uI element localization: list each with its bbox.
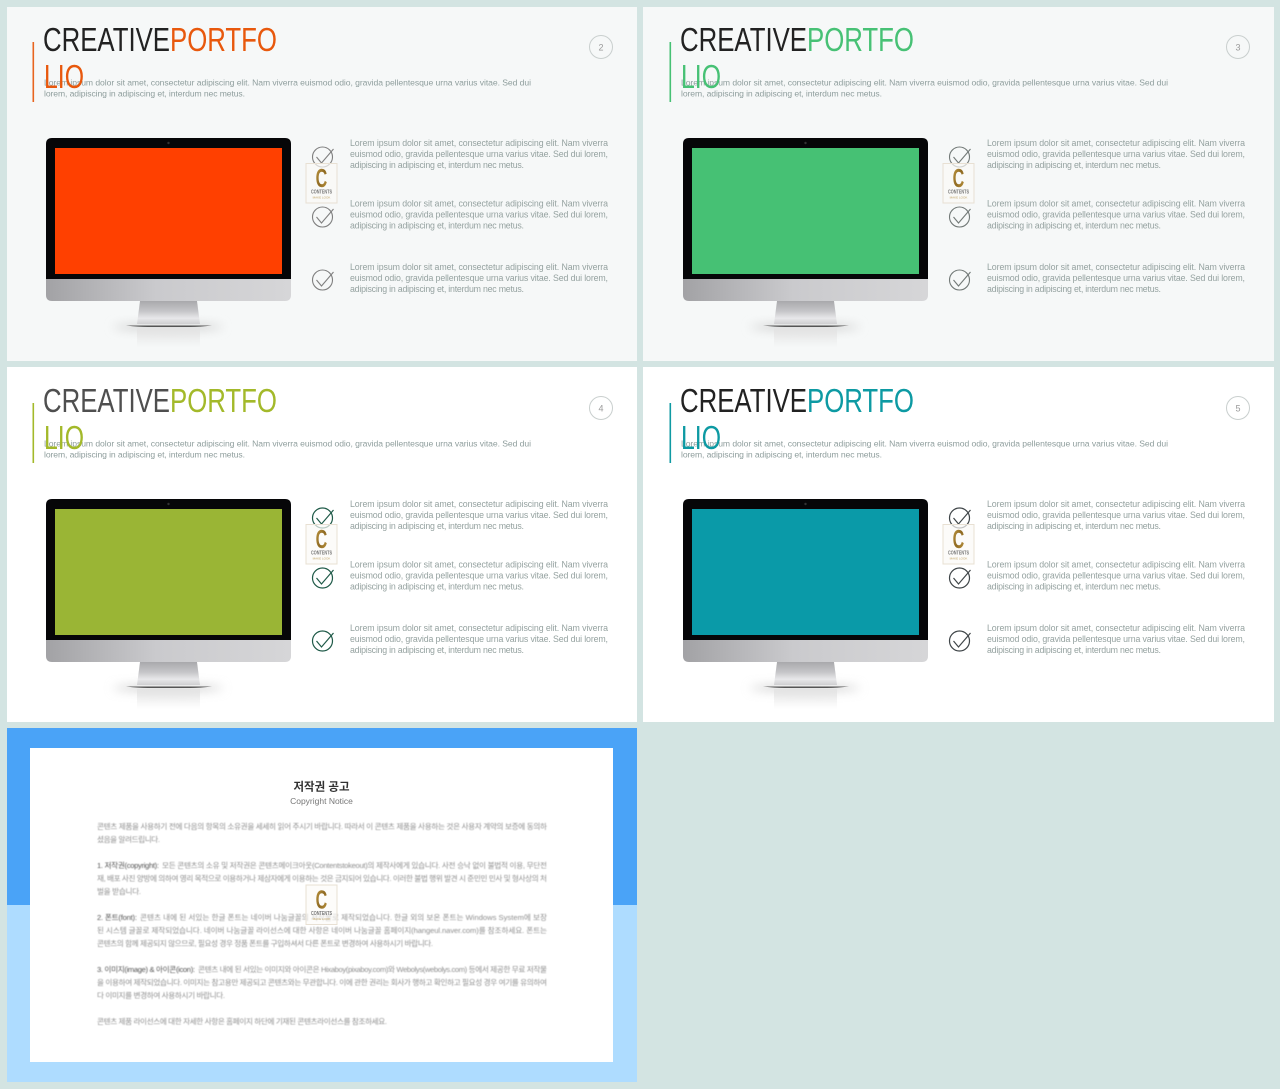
description: lorem, adipiscing in adipiscing et, interdum nec metus. [681,450,882,460]
title: PORTFO [807,382,914,419]
title [680,21,914,95]
title: CREATIVE [680,382,807,419]
title: LIO [681,58,721,95]
title [43,21,277,95]
notice body text: 셨음을 알려드립니다. [97,834,160,844]
watermark logo: C [316,163,328,193]
accent bar [670,42,671,102]
notice heading: 저작권 공고 [293,780,350,794]
watermark logo: C [953,524,965,554]
watermark logo [943,524,974,564]
notice body text: 2. 폰트(font): [97,913,137,922]
monitor [683,138,928,348]
watermark logo: C [316,524,328,554]
watermark logo: MAKE LOOK [950,196,967,200]
notice body text: 1. 저작권(copyright): [97,860,159,870]
body text: adipiscing in adipiscing et, interdum nec metus. [987,582,1161,592]
watermark logo: C [316,884,328,915]
panel: slide 4 lime [7,367,637,722]
page number: 2 [598,42,604,52]
description: lorem, adipiscing in adipiscing et, interdum nec metus. [681,88,882,98]
description [44,78,531,98]
description [681,78,1168,98]
notice body text: 을 이용하여 제작되었습니다. 이미지는 참고용만 제공되고 콘텐츠와는 무관합니다. 이에 관한 권리는 회사가 행하고 확인하고 필요성 경우 여기를 유의하여 [97,977,547,987]
title [680,382,914,456]
body text: Lorem ipsum dolor sit amet, consectetur adipiscing elit. Nam viverra [350,198,608,208]
title: CREATIVE [680,21,807,58]
body text: adipiscing in adipiscing et, interdum nec metus. [987,160,1161,170]
title: PORTFO [807,21,914,58]
notice body text: 콘텐츠 제품을 사용하기 전에 다음의 항목의 소유권을 세세히 읽어 주시기 바랍니다. 따라서 이 콘텐츠 제품을 사용하는 것은 사용자 계약의 보증에 동의하 [97,821,547,831]
watermark logo: C [953,163,965,193]
body text: euismod odio, gravida pellentesque urna varius vitae. Sed dui lorem, [987,510,1245,520]
watermark logo: CONTENTS [311,911,333,917]
notice body text: 재, 배포 사진 양방에 의하여 영리 목적으로 이용하거나 제삼자에게 이용하는 것은 금지되어 있습니다. 이러한 불법 행위 발견 시 준민민 민사 및 형사상의 처 [97,873,547,883]
body text: adipiscing in adipiscing et, interdum nec metus. [987,645,1161,655]
page number [1226,396,1250,420]
body text: euismod odio, gravida pellentesque urna varius vitae. Sed dui lorem, [987,634,1245,644]
watermark logo: MAKE LOOK [313,917,330,921]
accent bar [32,403,34,463]
body text: adipiscing in adipiscing et, interdum nec metus. [350,521,524,531]
body text: Lorem ipsum dolor sit amet, consectetur adipiscing elit. Nam viverra [987,138,1245,148]
page number: 4 [598,404,604,414]
body text: Lorem ipsum dolor sit amet, consectetur adipiscing elit. Nam viverra [987,198,1245,208]
body text: Lorem ipsum dolor sit amet, consectetur adipiscing elit. Nam viverra [350,499,608,509]
notice body text: 다 이미지를 변경하여 사용하시기 바랍니다. [97,990,225,1000]
page number: 5 [1235,404,1241,414]
body text: euismod odio, gravida pellentesque urna varius vitae. Sed dui lorem, [987,570,1245,580]
body text: euismod odio, gravida pellentesque urna varius vitae. Sed dui lorem, [350,510,608,520]
watermark logo: CONTENTS [948,190,970,196]
description [44,438,531,460]
body text: euismod odio, gravida pellentesque urna varius vitae. Sed dui lorem, [987,273,1245,283]
description: Lorem ipsum dolor sit amet, consectetur adipiscing elit. Nam viverra euismod odio, gravida pellentesque urna varius vitae. Sed dui [44,438,531,448]
body text: adipiscing in adipiscing et, interdum nec metus. [350,284,524,294]
watermark logo [306,524,337,564]
description: Lorem ipsum dolor sit amet, consectetur adipiscing elit. Nam viverra euismod odio, gravida pellentesque urna varius vitae. Sed dui [44,78,531,88]
body text: euismod odio, gravida pellentesque urna varius vitae. Sed dui lorem, [987,149,1245,159]
body text: euismod odio, gravida pellentesque urna varius vitae. Sed dui lorem, [350,634,608,644]
body text: adipiscing in adipiscing et, interdum nec metus. [987,220,1161,230]
title: CREATIVE [43,382,170,419]
description: Lorem ipsum dolor sit amet, consectetur adipiscing elit. Nam viverra euismod odio, gravida pellentesque urna varius vitae. Sed dui [681,78,1168,88]
body text: adipiscing in adipiscing et, interdum nec metus. [350,220,524,230]
body text [350,499,608,655]
title: LIO [44,58,84,95]
description: Lorem ipsum dolor sit amet, consectetur adipiscing elit. Nam viverra euismod odio, gravida pellentesque urna varius vitae. Sed dui [681,438,1168,448]
panel: slide 2 orange [7,7,637,361]
title: PORTFO [170,382,277,419]
monitor [683,499,928,709]
notice body text: 벌을 받습니다. [97,886,141,896]
body text: euismod odio, gravida pellentesque urna varius vitae. Sed dui lorem, [350,149,608,159]
title: LIO [681,419,721,456]
check icons [312,508,334,651]
body text: Lorem ipsum dolor sit amet, consectetur adipiscing elit. Nam viverra [350,560,608,570]
accent bar [670,403,671,463]
watermark logo [943,163,974,203]
notice body text: 3. 이미지(image) & 아이콘(icon): [97,964,195,974]
body text: Lorem ipsum dolor sit amet, consectetur adipiscing elit. Nam viverra [350,623,608,633]
notice body text: 콘텐츠의 함께 제공되지 않으므로, 필요성 경우 정품 폰트를 구입하셔서 다른 폰트로 변경하여 사용하시기 바랍니다. [97,938,433,948]
page number: 3 [1235,42,1241,52]
watermark logo: CONTENTS [948,550,970,556]
description: lorem, adipiscing in adipiscing et, interdum nec metus. [44,88,245,98]
watermark logo: MAKE LOOK [950,556,967,560]
accent bar [32,42,34,102]
watermark logo: MAKE LOOK [313,556,330,560]
watermark logo [306,884,337,924]
monitor [46,138,291,348]
notice heading: Copyright Notice [290,796,353,806]
notice body text: 모든 콘텐츠의 소유 및 저작권은 콘텐츠메이크아웃(Contentstokeout)의 제작사에게 있습니다. 사전 승낙 없이 불법적 이용, 무단전 [162,860,547,870]
page number [590,36,612,58]
check icons [950,508,970,651]
panel: slide 5 teal [643,367,1274,722]
description: lorem, adipiscing in adipiscing et, interdum nec metus. [44,450,245,460]
title: PORTFO [170,21,277,58]
watermark logo: CONTENTS [311,550,333,556]
body text: adipiscing in adipiscing et, interdum nec metus. [350,582,524,592]
description [681,438,1168,460]
check icons [312,147,334,290]
body text: Lorem ipsum dolor sit amet, consectetur adipiscing elit. Nam viverra [350,138,608,148]
body text: euismod odio, gravida pellentesque urna varius vitae. Sed dui lorem, [350,210,608,220]
body text: euismod odio, gravida pellentesque urna varius vitae. Sed dui lorem, [987,210,1245,220]
panel: copyright notice [7,728,637,1082]
body text: euismod odio, gravida pellentesque urna varius vitae. Sed dui lorem, [350,570,608,580]
body text: adipiscing in adipiscing et, interdum nec metus. [987,521,1161,531]
body text: adipiscing in adipiscing et, interdum nec metus. [350,160,524,170]
check icons [950,147,970,290]
title: CREATIVE [43,21,170,58]
body text: adipiscing in adipiscing et, interdum nec metus. [350,645,524,655]
notice body text [97,821,547,1026]
notice body text: 된 시스템 글꼴로 제작되었습니다. 네이버 나눔글꼴 라이선스에 대한 사항은 네이버 나눔글꼴 홈페이지(hangeul.naver.com)를 참조하세요. 폰트는 [97,925,547,935]
body text: Lorem ipsum dolor sit amet, consectetur adipiscing elit. Nam viverra [987,560,1245,570]
title [43,382,277,456]
title: LIO [44,419,84,456]
body text [987,499,1245,655]
panel: slide 3 green [643,7,1274,361]
page number [1226,36,1250,58]
body text: Lorem ipsum dolor sit amet, consectetur adipiscing elit. Nam viverra [987,623,1245,633]
notice body text: 콘텐츠 내에 된 서있는 이미지와 아이콘은 Hixaboy(pixaboy.com)와 Webolys(webolys.com) 등에서 제공한 무료 저작물 [198,964,547,974]
notice heading [290,780,353,806]
watermark logo [306,163,337,203]
watermark logo: CONTENTS [311,190,333,196]
monitor [46,499,291,709]
notice body text: 콘텐츠 제품 라이선스에 대한 자세한 사항은 홈페이지 하단에 기재된 콘텐츠라이선스를 참조하세요. [97,1016,387,1026]
watermark logo: MAKE LOOK [313,196,330,200]
body text: Lorem ipsum dolor sit amet, consectetur adipiscing elit. Nam viverra [350,262,608,272]
body text: Lorem ipsum dolor sit amet, consectetur adipiscing elit. Nam viverra [987,499,1245,509]
body text: adipiscing in adipiscing et, interdum nec metus. [987,284,1161,294]
body text: euismod odio, gravida pellentesque urna varius vitae. Sed dui lorem, [350,273,608,283]
body text [987,138,1245,294]
notice body text: 콘텐츠 내에 된 서있는 한글 폰트는 네이버 나눔글꼴의 저작물로 제작되었습니다. 한글 외의 보온 폰트는 Windows System에 보장 [140,912,547,922]
body text [350,138,608,294]
page number [590,396,612,420]
body text: Lorem ipsum dolor sit amet, consectetur adipiscing elit. Nam viverra [987,262,1245,272]
